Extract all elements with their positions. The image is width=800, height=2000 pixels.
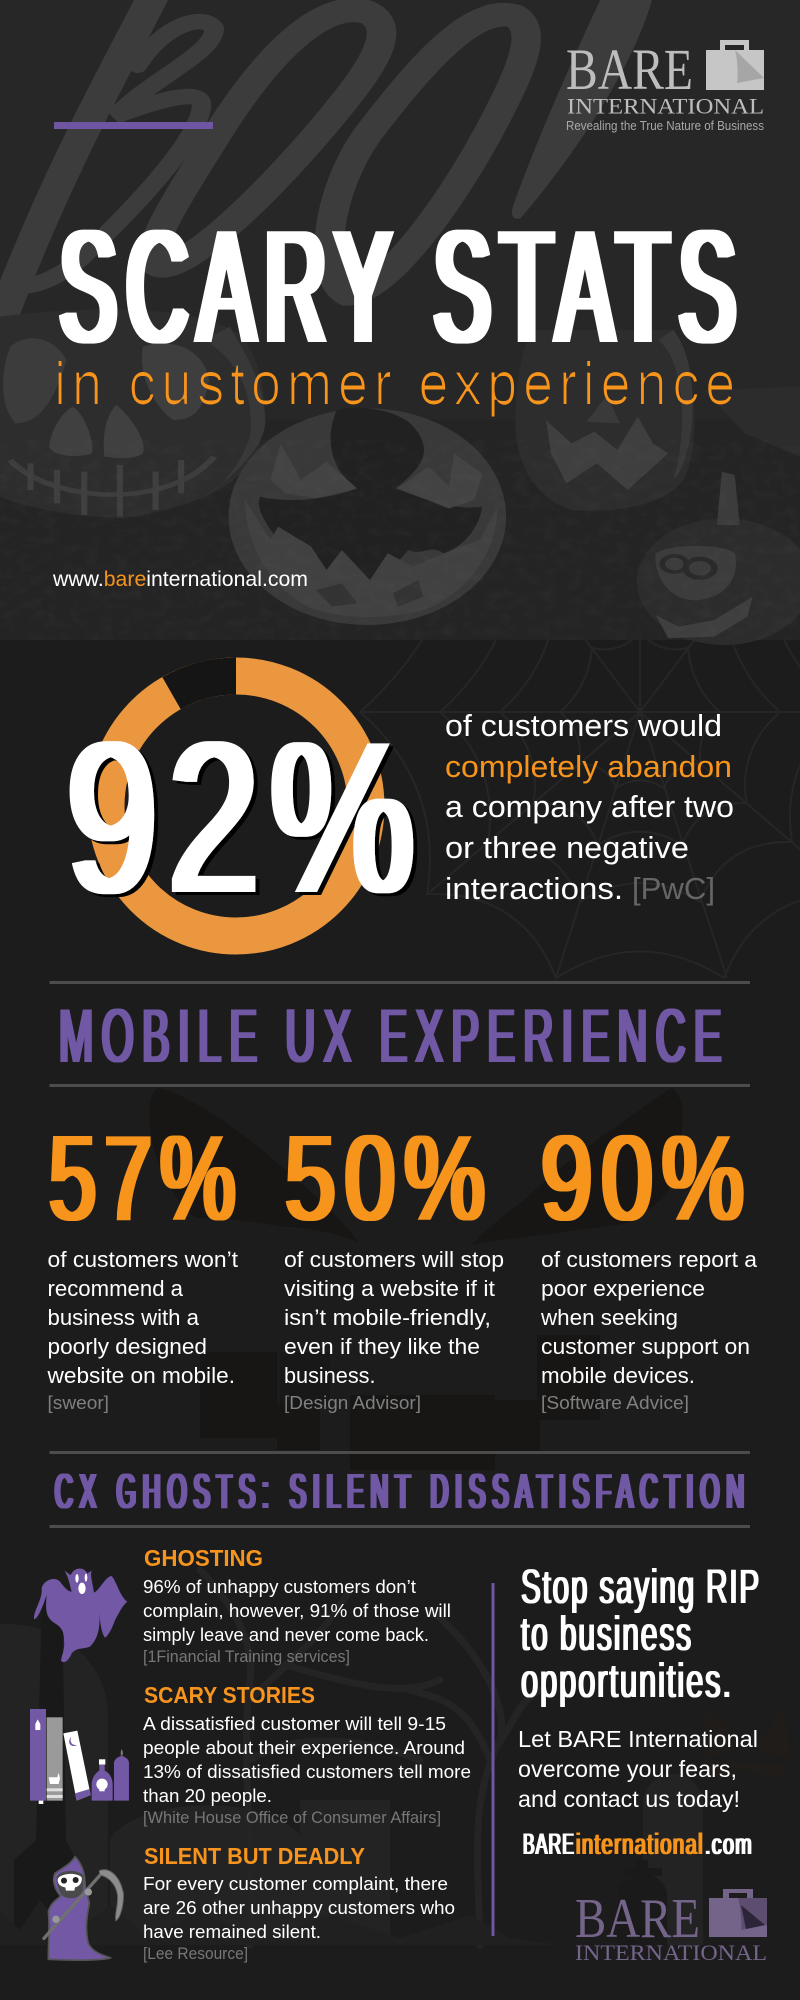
stat text: visiting a website if it: [284, 1276, 496, 1301]
body text: 96% of unhappy customers don’t: [143, 1576, 416, 1597]
logo: BARE International footer: [575, 1888, 767, 1965]
cta text: overcome your fears,: [518, 1756, 737, 1782]
donut chart: [106, 676, 366, 936]
cta text: Let BARE International: [518, 1726, 758, 1752]
stat text: poorly designed: [48, 1334, 207, 1359]
cta text: [518, 1726, 758, 1812]
description: a company after two: [445, 789, 734, 824]
jack-o-lantern eyes: [700, 1705, 795, 1780]
body text: simply leave and never come back.: [143, 1624, 429, 1645]
subtitle: in customer experience: [54, 351, 741, 417]
cta url: international: [576, 1828, 704, 1861]
pumpkin: center: [229, 408, 506, 625]
stat text: of customers will stop: [284, 1247, 504, 1272]
pumpkins: [0, 309, 800, 645]
stat text: website on mobile.: [46, 1363, 235, 1388]
description: interactions.: [445, 871, 623, 906]
panel: scary stories: [30, 1682, 471, 1827]
graveyard watermark: [0, 1570, 795, 1945]
panel: call to action: [518, 1561, 767, 1965]
website url: www.bareinternational.com: [52, 568, 308, 591]
stat text: [540, 1247, 757, 1413]
stat text: [Software Advice]: [541, 1392, 689, 1413]
panel: ghosting: [34, 1545, 451, 1666]
stat number: 50%: [285, 1110, 494, 1246]
icon: books and potions: [30, 1709, 129, 1804]
body text: [143, 1873, 455, 1963]
logo: BARE International: INTERNATIONAL: [567, 94, 764, 118]
obelisk: [14, 1590, 76, 1945]
logo: BARE International footer: INTERNATIONAL: [575, 1940, 767, 1965]
logo: BARE International: [566, 37, 764, 133]
cta text: and contact us today!: [518, 1786, 740, 1812]
panel: mobile stat 90 percent: [540, 1110, 757, 1413]
BOO hand lettering: [5, 0, 653, 310]
logo: BARE International footer: BARE: [575, 1888, 700, 1950]
stat text: business with a: [48, 1305, 199, 1330]
accent bar: [54, 122, 213, 129]
logo: BARE International: BARE: [566, 37, 693, 102]
body text: [143, 1576, 451, 1666]
stat text: when seeking: [540, 1305, 678, 1330]
small dark tombstone: [618, 1860, 667, 1945]
icon: briefcase: [706, 40, 764, 90]
spider web watermark: [360, 432, 800, 978]
body text: 13% of dissatisfied customers tell more: [143, 1761, 471, 1782]
pumpkin: bottom right: [637, 472, 800, 645]
icon: briefcase: [709, 1889, 767, 1937]
stat text: of customers report a: [541, 1247, 757, 1272]
heading: GHOSTING: [144, 1545, 263, 1571]
tombstones: [0, 1624, 703, 1945]
stat text: mobile devices.: [541, 1363, 695, 1388]
grass: [0, 1900, 560, 1945]
stat text: [Design Advisor]: [284, 1392, 421, 1413]
body text: complain, however, 91% of those will: [143, 1600, 451, 1621]
pumpkin: left: [0, 309, 265, 518]
description: of customers would: [445, 708, 722, 743]
stat text: customer support on: [541, 1334, 750, 1359]
description: or three negative: [445, 830, 689, 865]
heading: SILENT BUT DEADLY: [144, 1843, 365, 1869]
panel: hero: [0, 0, 800, 645]
stat text: even if they like the: [284, 1334, 480, 1359]
description: [PwC]: [632, 871, 715, 906]
body text: [Lee Resource]: [143, 1945, 248, 1963]
cta heading: to business: [521, 1608, 693, 1661]
icon: ghost: [34, 1568, 127, 1662]
ground: [0, 420, 800, 640]
body text: A dissatisfied customer will tell 9-15: [143, 1713, 446, 1734]
stat number: 57%: [49, 1110, 244, 1246]
body text: [1Financial Training services]: [143, 1648, 350, 1666]
description: [445, 708, 734, 906]
logo: BARE International: Revealing the True Nature of Business: [566, 119, 764, 133]
cta url: .com: [705, 1828, 753, 1861]
pumpkin face watermark: [149, 1088, 683, 1470]
ground texture: [0, 470, 800, 639]
body text: [143, 1713, 471, 1827]
pumpkin: right: [515, 330, 694, 511]
body text: [White House Office of Consumer Affairs]: [143, 1809, 441, 1827]
cta url: BARE: [523, 1828, 575, 1861]
body text: For every customer complaint, there: [143, 1873, 448, 1894]
stat text: [46, 1247, 239, 1413]
divider rules: [50, 981, 750, 1528]
vertical divider: [492, 1583, 494, 1936]
body text: than 20 people.: [143, 1785, 272, 1806]
description: completely abandon: [445, 749, 732, 784]
body text: people about their experience. Around: [143, 1737, 465, 1758]
panel: mobile stat 50 percent: [284, 1110, 504, 1413]
panel: mobile stat 57 percent: [46, 1110, 244, 1413]
body text: have remained silent.: [143, 1921, 321, 1942]
bare trees: [200, 1570, 540, 1945]
stat text: recommend a: [48, 1276, 183, 1301]
heading: SCARY STORIES: [144, 1682, 315, 1708]
stat text: of customers won’t: [48, 1247, 239, 1272]
panel: 92 percent stat: [67, 676, 734, 938]
panel: silent but deadly: [44, 1843, 455, 1963]
cta heading: [521, 1561, 761, 1708]
stat text: isn’t mobile-friendly,: [284, 1305, 491, 1330]
icon: grim reaper: [44, 1857, 123, 1960]
stat text: poor experience: [541, 1276, 705, 1301]
big number: 92%: [67, 696, 426, 938]
stat text: [sweor]: [48, 1392, 109, 1413]
body text: are 26 other unhappy customers who: [143, 1897, 455, 1918]
stat text: business.: [284, 1363, 376, 1388]
stat text: [284, 1247, 504, 1413]
